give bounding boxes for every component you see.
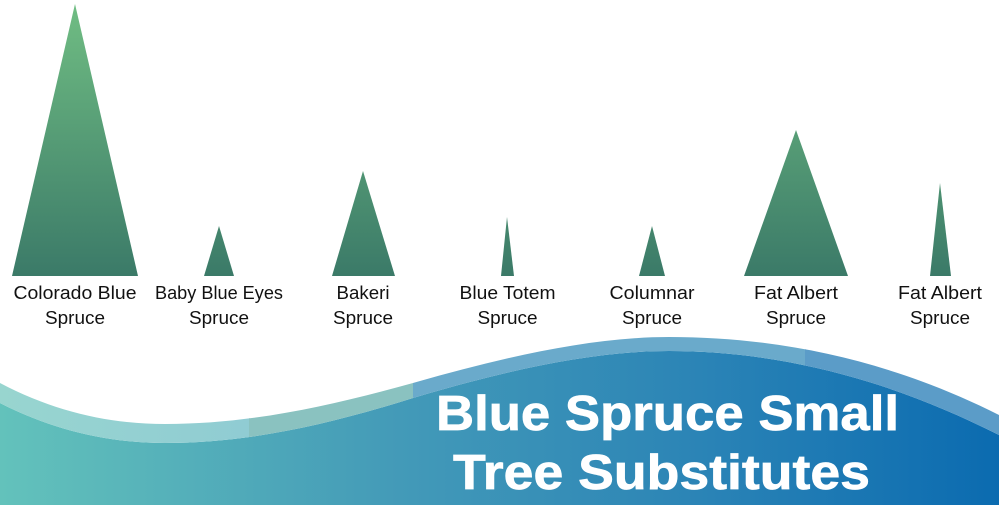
tree: Blue Totem Spruce <box>501 217 514 276</box>
tree: Baby Blue Eyes Spruce <box>204 226 234 276</box>
tree: Fat Albert Spruce (narrow) <box>930 183 951 276</box>
label: Baby Blue Eyes Spruce: Spruce <box>189 307 249 328</box>
title: Blue Spruce Small <box>436 387 899 441</box>
label: Blue Totem Spruce <box>460 282 556 328</box>
label: Fat Albert Spruce (second) <box>898 282 982 328</box>
label: Fat Albert Spruce <box>754 282 838 328</box>
label: Bakeri Spruce <box>333 282 393 328</box>
label: Fat Albert Spruce: Spruce <box>766 307 826 328</box>
label: Blue Totem Spruce: Blue Totem <box>460 282 556 303</box>
label: Baby Blue Eyes Spruce <box>155 282 283 328</box>
label: Bakeri Spruce: Spruce <box>333 307 393 328</box>
tree: Colorado Blue Spruce <box>12 4 138 276</box>
tree: Bakeri Spruce <box>332 171 395 276</box>
label: Bakeri Spruce: Bakeri <box>336 282 390 303</box>
label: Baby Blue Eyes Spruce: Baby Blue Eyes <box>155 282 283 303</box>
label: Fat Albert Spruce (second): Fat Albert <box>898 282 982 303</box>
label: Fat Albert Spruce (second): Spruce <box>910 307 970 328</box>
title: Tree Substitutes <box>453 446 870 500</box>
wave band <box>0 337 999 443</box>
label: Fat Albert Spruce: Fat Albert <box>754 282 838 303</box>
label: Columnar Spruce: Spruce <box>622 307 682 328</box>
label: Columnar Spruce: Columnar <box>610 282 694 303</box>
label: Colorado Blue Spruce <box>14 282 136 328</box>
label: Colorado Blue Spruce: Colorado Blue <box>14 282 136 303</box>
label: Blue Totem Spruce: Spruce <box>478 307 538 328</box>
tree: Fat Albert Spruce <box>744 130 848 276</box>
label: Columnar Spruce <box>610 282 694 328</box>
tree: Columnar Spruce <box>639 226 665 276</box>
title <box>436 387 899 500</box>
label: Colorado Blue Spruce: Spruce <box>45 307 105 328</box>
wave background <box>0 351 999 505</box>
